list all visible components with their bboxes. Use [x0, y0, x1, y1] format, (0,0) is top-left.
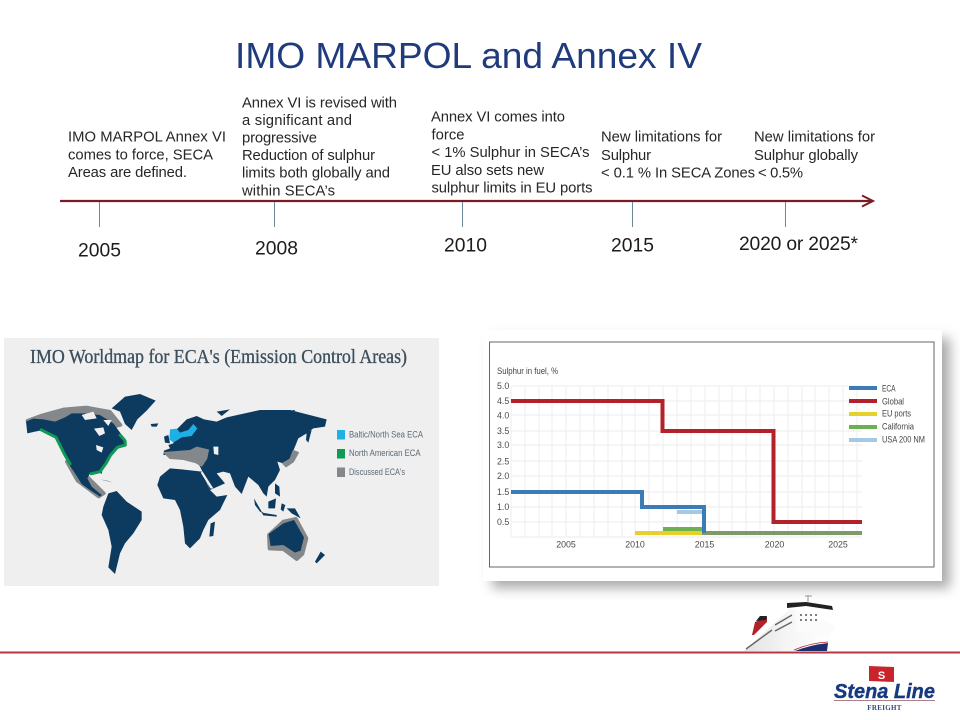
USA 200 NM line: [677, 510, 702, 514]
milestone 2010 text: [431, 110, 592, 197]
map legend: [337, 430, 423, 477]
footer line: [0, 652, 960, 654]
milestone 2010 text: EU also sets new: [431, 163, 544, 179]
timeline ticks: [100, 202, 786, 227]
milestone 2020 text: Sulphur globally: [754, 148, 859, 164]
map legend: North American ECA: [349, 448, 421, 458]
milestone 2020 text: < 0.5%: [758, 165, 803, 181]
map heading: IMO Worldmap for ECA's (Emission Control Areas): [30, 346, 407, 368]
milestone 2008 text: a significant and: [242, 113, 352, 129]
data series: [511, 401, 862, 533]
milestone 2005 text: comes to force, SECA: [68, 148, 213, 164]
logo: Stena Line Freight: S: [878, 670, 885, 682]
milestone 2015 text: Sulphur: [601, 148, 651, 164]
panel: sulphur in fuel chart: [483, 330, 950, 588]
panel: world map of emission control areas: [4, 338, 439, 586]
x axis labels: 2020: [765, 540, 784, 550]
x axis labels: 2010: [625, 540, 645, 550]
Global line: [511, 401, 862, 522]
discussed ECA coasts behind land: [27, 407, 307, 559]
EU ports line: [635, 531, 702, 535]
milestone 2010 text: Annex VI comes into: [431, 110, 565, 126]
y axis title: Sulphur in fuel, %: [497, 366, 558, 376]
logo: Stena Line Freight: [834, 666, 935, 712]
chart grid: [511, 386, 862, 537]
milestone 2015 text: New limitations for: [601, 130, 722, 146]
year labels: 2015: [611, 236, 654, 257]
milestone 2010 text: < 1% Sulphur in SECA’s: [432, 145, 590, 161]
icon: ship: [744, 595, 836, 651]
chart legend: EU ports: [882, 408, 911, 418]
merged low limit line: [702, 531, 862, 535]
Baltic and North Sea ECA: [169, 424, 197, 443]
title: IMO MARPOL and Annex IV: [235, 36, 702, 76]
y axis labels: 2.5: [497, 456, 509, 466]
timeline: [60, 95, 875, 262]
milestone 2008 text: Reduction of sulphur: [242, 148, 375, 164]
discussed ECA overlays: [164, 447, 298, 467]
ECA line: [511, 492, 704, 533]
milestone 2010 text: force: [432, 127, 464, 143]
California line: [663, 527, 702, 531]
milestone 2008 text: within SECA’s: [241, 183, 335, 199]
milestone 2008 text: limits both globally and: [242, 166, 390, 182]
year labels: 2005: [78, 241, 121, 262]
timeline arrow: [60, 196, 873, 206]
milestone 2005 text: IMO MARPOL Annex VI: [68, 130, 226, 146]
logo flag: [869, 666, 894, 682]
map legend: Baltic/North Sea ECA: [349, 430, 423, 440]
continents: [26, 394, 327, 574]
milestone 2005 text: [68, 130, 226, 181]
chart legend: [849, 382, 925, 444]
logo subtitle: FREIGHT: [867, 704, 902, 712]
y axis labels: 4.5: [497, 396, 509, 406]
North American ECA coast: [40, 429, 125, 474]
x axis labels: [556, 540, 848, 550]
y axis labels: 3.5: [497, 426, 509, 436]
chart legend: California: [882, 420, 915, 432]
milestone 2020 text: [754, 130, 875, 181]
year labels: 2008: [255, 238, 298, 259]
milestone 2008 text: progressive: [242, 130, 317, 146]
world map: [26, 394, 327, 574]
milestone 2008 text: [241, 95, 397, 199]
chart legend: ECA: [882, 382, 896, 394]
inland water: [82, 412, 218, 489]
card shadow: [492, 338, 950, 588]
milestone 2015 text: < 0.1 % In SECA Zones: [601, 165, 755, 181]
y axis labels: 5.0: [497, 381, 509, 391]
chart legend: Global: [882, 396, 904, 406]
milestone 2005 text: Areas are defined.: [68, 165, 187, 181]
y axis labels: 2.0: [497, 471, 509, 481]
y axis labels: 0.5: [497, 517, 509, 527]
year labels: 2010: [444, 236, 487, 257]
y axis labels: [497, 381, 509, 527]
x axis labels: 2015: [695, 540, 714, 550]
logo wordmark: Stena Line: [834, 680, 935, 703]
milestone 2020 text: New limitations for: [754, 130, 875, 146]
map legend: Discussed ECA's: [349, 467, 405, 477]
milestone 2015 text: [601, 130, 755, 181]
milestone 2008 text: Annex VI is revised with: [242, 95, 397, 111]
year labels: 2020 or 2025*: [739, 234, 858, 255]
y axis labels: 1.5: [497, 487, 509, 497]
x axis labels: 2005: [556, 540, 576, 550]
y axis labels: 4.0: [497, 410, 509, 420]
chart legend: USA 200 NM: [882, 434, 925, 444]
year labels: [78, 234, 858, 262]
x axis labels: 2025: [828, 540, 848, 550]
y axis labels: 3.0: [497, 440, 509, 450]
y axis labels: 1.0: [497, 502, 509, 512]
milestone 2010 text: sulphur limits in EU ports: [432, 181, 592, 197]
